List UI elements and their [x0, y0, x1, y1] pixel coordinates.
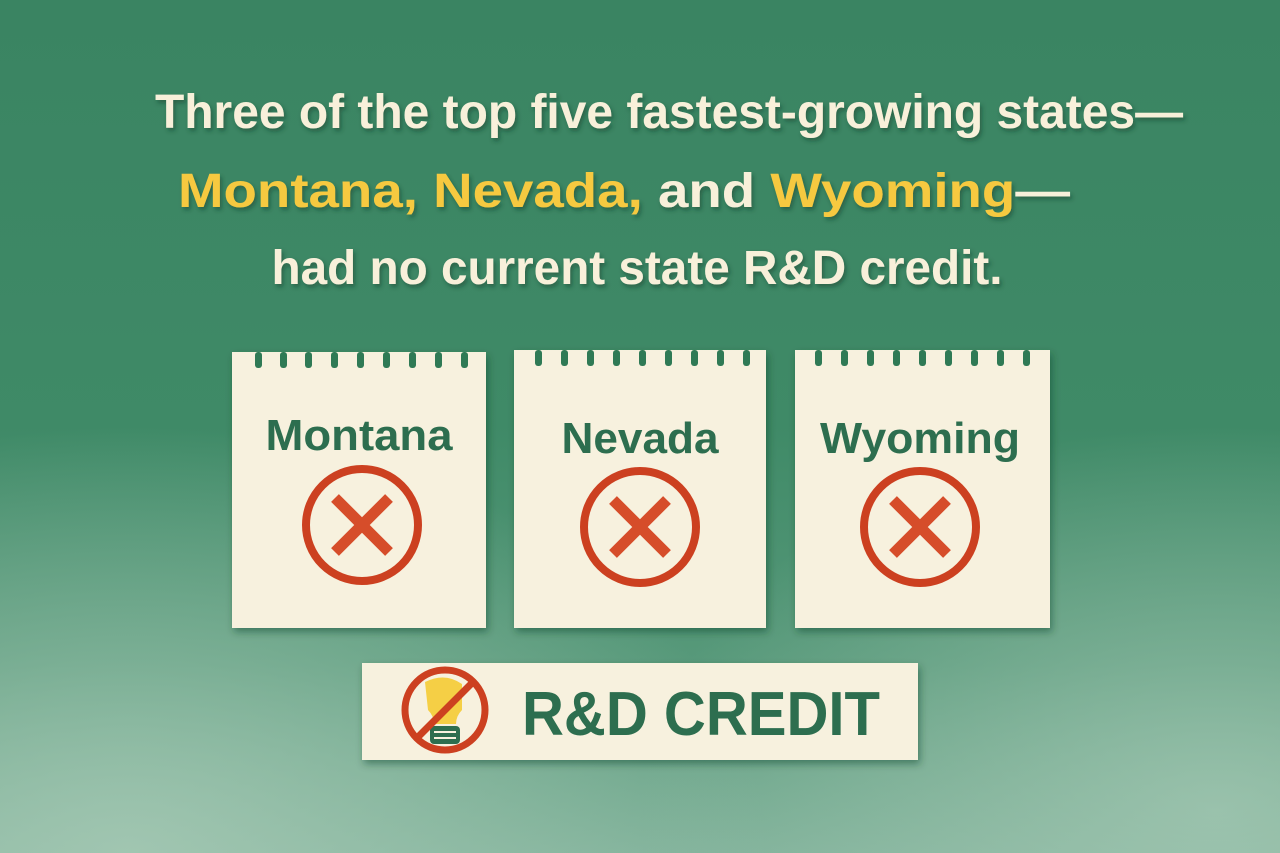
title: Three of the top five fastest-growing states—	[155, 86, 1183, 139]
card: Montana: Montana	[266, 411, 453, 460]
card: Wyoming	[795, 350, 1050, 628]
title: Montana, Nevada, and Wyoming —	[178, 165, 1070, 218]
icon: no lightbulb	[405, 670, 485, 750]
card: Nevada	[514, 350, 766, 628]
title: had no current state R&D credit.	[272, 242, 1002, 295]
title	[155, 86, 1183, 295]
banner: R&D credit: R&D CREDIT	[522, 680, 880, 749]
icon: red X circle	[584, 471, 696, 583]
icon: red X circle	[864, 471, 976, 583]
card: Nevada: Nevada	[562, 414, 719, 463]
card: Montana	[232, 352, 486, 628]
icon: red X circle	[306, 469, 418, 581]
banner: R&D credit	[362, 663, 918, 760]
card: Wyoming: Wyoming	[820, 414, 1020, 463]
